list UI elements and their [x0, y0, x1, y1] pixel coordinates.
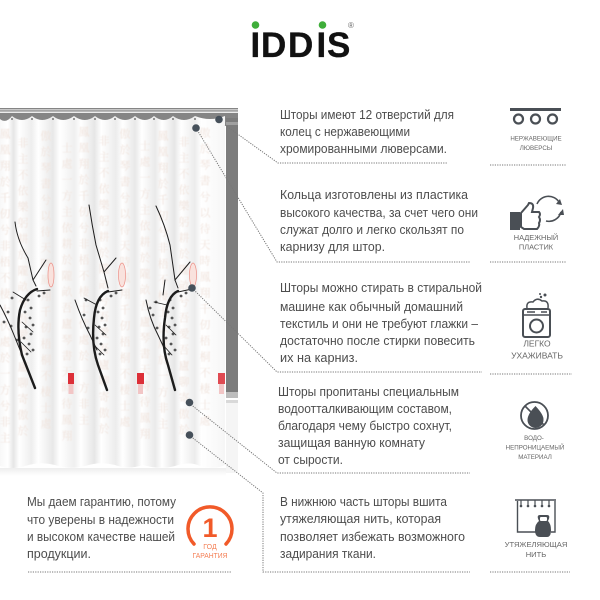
text block 1: колец с нержавеющими [280, 125, 410, 139]
icon: thumb up and recycling arrows: НАДЕЖНЫЙ [514, 233, 558, 242]
branch left [0, 222, 50, 388]
icon: thumb up and recycling arrows [510, 196, 564, 252]
icon: washing machine [511, 293, 563, 360]
icon: waterproof drop [506, 402, 564, 461]
text block 2: карнизу для штор. [280, 240, 385, 254]
text block 4: водоотталкивающим составом, [278, 402, 452, 416]
guarantee badge: 1 year [188, 507, 232, 560]
pale calligraphy columns: 非主不依樂躬耕於隴畝兮吾愛吾廬聊寄傲於 [96, 134, 112, 439]
icon: washing machine: УХАЖИВАТЬ [511, 350, 563, 360]
icon: waterproof drop: НЕПРОНИЦАЕМЫЙ [506, 444, 564, 452]
text block 4: от сырости. [278, 453, 343, 467]
text block 3: достаточно после стирки повесить [280, 334, 475, 348]
pale calligraphy columns: 傲於琴書兮以待天時鳳翔千仞梧桐不棲士處 [38, 129, 54, 434]
text block 5: В нижнюю часть шторы вшита [280, 495, 447, 509]
leader line 3 [192, 288, 482, 372]
icon: weighted curtain: УТЯЖЕЛЯЮЩАЯ [505, 540, 567, 549]
text block 5: утяжеляющая нить, которая [280, 512, 441, 526]
guarantee text: что уверены в надежности [27, 513, 174, 527]
icon: thumb up and recycling arrows: ПЛАСТИК [519, 242, 554, 252]
logo: IDDIS: IDDIS [250, 26, 350, 65]
pale calligraphy columns: 傲於琴書兮以待天時鳳翔千仞梧桐不棲士處 [117, 127, 133, 432]
pale calligraphy columns: 傲於琴書兮以待天時鳳翔千仞梧桐不棲士處 [197, 126, 213, 431]
text block 1 [280, 108, 454, 156]
leader line 1 [225, 125, 448, 163]
text block 3 [280, 281, 482, 365]
pale calligraphy columns: 鳳凰翔於千仞兮非梧不棲士伏處於一方非主 [76, 126, 92, 430]
text block 1: хромированными люверсами. [280, 142, 447, 156]
hooks [11, 118, 196, 120]
text block 2: высокого качества, за счет чего они [280, 206, 478, 220]
pale calligraphy columns: 非主不依樂躬耕於隴畝兮吾愛吾廬聊寄傲於 [15, 136, 31, 441]
text block 3: их на карниз. [280, 351, 358, 365]
pale calligraphy columns: 非主不依樂躬耕於隴畝兮吾愛吾廬聊寄傲於 [176, 135, 192, 440]
window frame rail [0, 108, 238, 476]
logo: IDDIS: ® [348, 21, 354, 30]
curtain photo [0, 108, 238, 476]
text block 4 [278, 385, 459, 467]
guarantee badge: 1 year: ГОД [203, 544, 217, 551]
guarantee text [27, 495, 177, 561]
leader line 4 [189, 403, 470, 473]
leader line 5 [189, 435, 470, 572]
text block 3: текстиль и они не требуют глажки – [280, 317, 478, 331]
text block 1: Шторы имеют 12 отверстий для [280, 108, 454, 122]
text block 2: Кольца изготовлены из пластика [280, 188, 468, 202]
guarantee badge: 1 year: 1 [202, 513, 218, 543]
guarantee text: продукции. [27, 547, 91, 561]
guarantee text: Мы даем гарантию, потому [27, 495, 177, 509]
red stamps [48, 263, 225, 394]
pale calligraphy columns: 鳳凰翔於千仞兮非梧不棲士伏處於一方非主 [155, 130, 171, 434]
pale calligraphy columns [0, 126, 213, 448]
text block 4: защищая ванную комнату [278, 436, 426, 450]
icon: washing machine: ЛЕГКО [523, 338, 551, 348]
icon: weighted curtain [505, 500, 567, 559]
pale calligraphy columns: 士處一方主依耕於隴畝吾廬琴書天時待鳳翔 [59, 141, 75, 446]
leader line 2 [196, 128, 470, 262]
icon: waterproof drop: ВОДО- [524, 435, 544, 442]
guarantee text: и высоком качестве нашей [27, 530, 175, 544]
icon: waterproof drop: МАТЕРИАЛ [518, 454, 552, 461]
pale calligraphy columns: 士處一方主依耕於隴畝吾廬琴書天時待鳳翔 [137, 139, 153, 444]
icon: grommets: ЛЮВЕРСЫ [520, 145, 552, 152]
text block 2: служат долго и легко скользят по [280, 223, 464, 237]
leader dots [186, 116, 223, 439]
branch middle [75, 205, 122, 390]
text block 5: задирания ткани. [280, 547, 376, 561]
text block 4: благодаря чему быстро сохнут, [278, 419, 452, 433]
icon: grommets [510, 108, 562, 152]
text block 3: машине как обычный домашний [280, 300, 463, 314]
text block 3: Шторы можно стирать в стиральной [280, 281, 482, 295]
branch right [146, 206, 192, 390]
text block 2 [280, 188, 478, 254]
guarantee divider [28, 571, 232, 573]
guarantee badge: 1 year: ГАРАНТИЯ [192, 553, 228, 560]
text block 4: Шторы пропитаны специальным [278, 385, 459, 399]
icon: weighted curtain: НИТЬ [526, 550, 546, 559]
curtain fabric [0, 116, 225, 468]
icon: grommets: НЕРЖАВЕЮЩИЕ [510, 136, 562, 142]
text block 5 [280, 495, 465, 561]
text block 5: позволяет избежать возможного [280, 530, 465, 544]
